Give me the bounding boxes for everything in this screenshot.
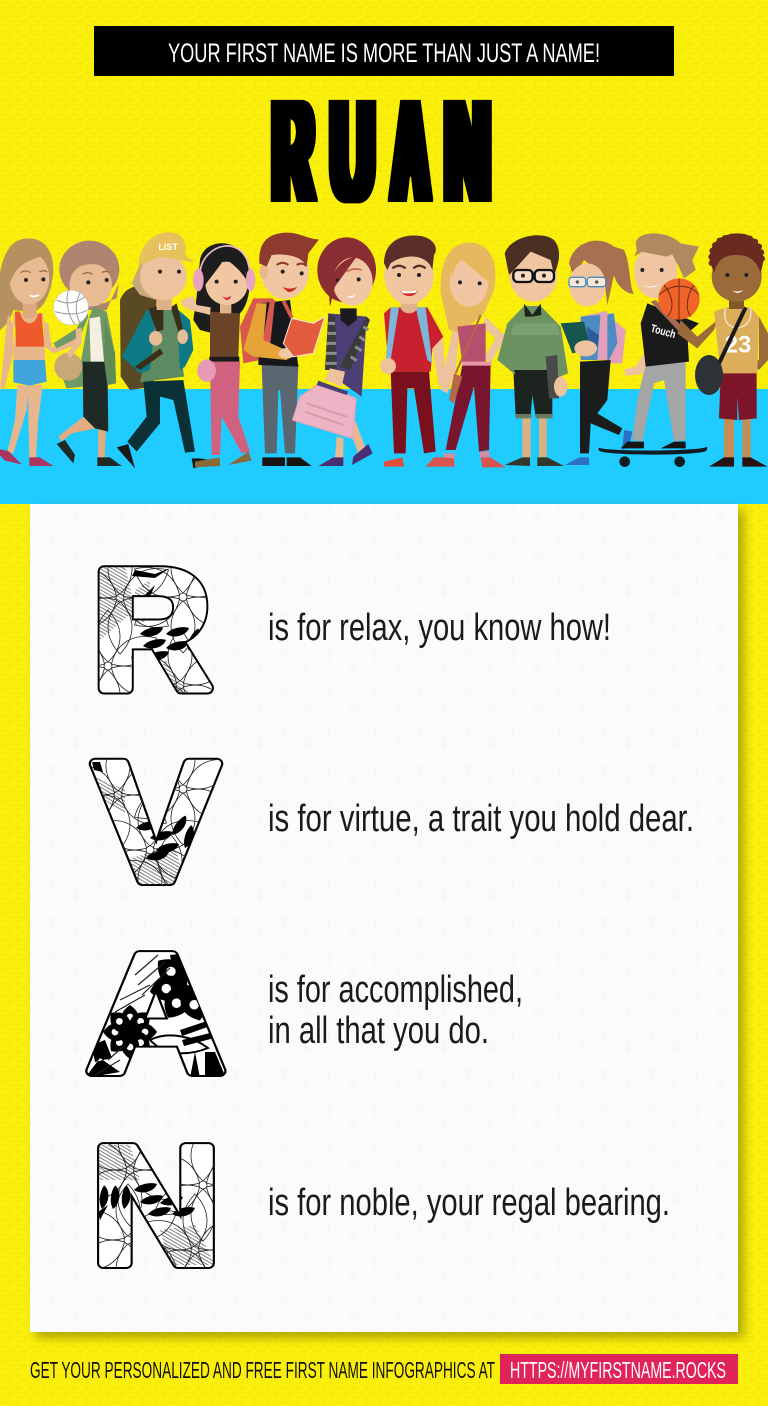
person 6: girl with pink bag (293, 237, 376, 466)
icon: floral letter A: A (87, 920, 225, 1106)
person 11: boy on skateboard with basketball: Touch (649, 323, 677, 341)
title: name: R (273, 70, 313, 232)
icon: floral letter R (98, 565, 214, 694)
icon: floral letter V (88, 758, 224, 886)
title: name: A (392, 70, 428, 232)
icon: floral letter R: R (93, 537, 211, 725)
people illustration: right group (380, 233, 768, 467)
person 7: boy in red shirt (380, 235, 454, 467)
person 3: hiker with cap and backpack: LIST (158, 242, 178, 252)
icon: floral letter R: R (93, 537, 211, 725)
person 11: boy on skateboard with basketball (621, 233, 700, 448)
text: A meaning: in all that you do. (268, 1010, 489, 1052)
icon: floral letter A: A (87, 920, 225, 1106)
person 2: girl with volleyball (53, 241, 122, 466)
icon: floral letter N (97, 1142, 215, 1269)
person 5: boy with book (240, 233, 325, 466)
person 12: boy in number 23 tank (677, 233, 768, 467)
person 10: girl with tablet and ponytail (561, 241, 634, 465)
person 1: girl in orange top (0, 238, 82, 466)
header banner (94, 26, 674, 76)
title: name (273, 70, 490, 232)
person 9: boy with glasses (497, 235, 568, 466)
panel: name meanings card (30, 504, 744, 1338)
icon: floral letter A (85, 950, 227, 1077)
text: A meaning: is for accomplished, (268, 969, 523, 1011)
text: A meaning (268, 969, 523, 1052)
icon: floral letter N: N (91, 1111, 221, 1299)
icon: floral letter V: V (94, 727, 218, 916)
cyan floor band (0, 389, 768, 504)
person 4: girl with headphones (182, 243, 255, 467)
text: R meaning: is for relax, you know how! (268, 607, 611, 649)
person 12: boy in number 23 tank: 23 (725, 332, 751, 359)
text: N (445, 70, 490, 232)
person 3: hiker with cap and backpack (117, 232, 220, 468)
icon: floral letter V: V (94, 727, 218, 916)
person 8: blonde girl (426, 243, 506, 467)
people illustration: left group (0, 232, 376, 468)
icon: floral letter N: N (91, 1111, 221, 1299)
title: name: U (331, 70, 374, 232)
skateboard (598, 447, 707, 467)
